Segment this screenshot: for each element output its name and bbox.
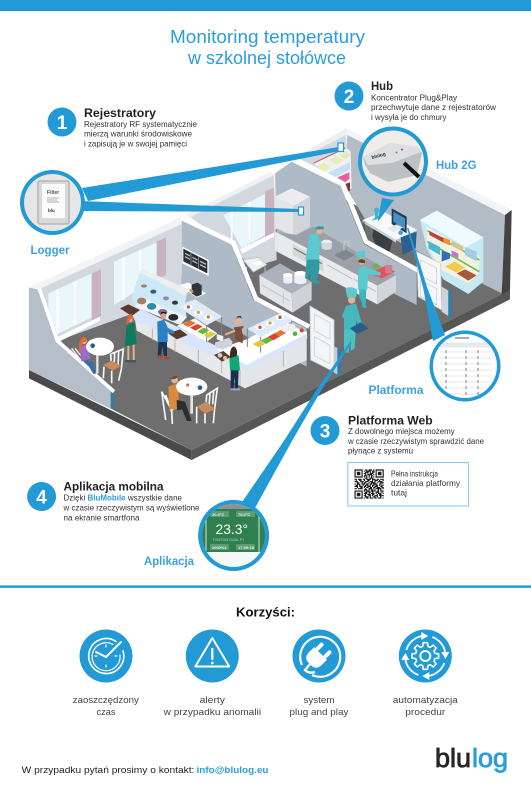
floor slab bbox=[29, 197, 510, 460]
logo: blulog: log bbox=[472, 745, 508, 773]
partition wall: kitchen bbox=[275, 159, 418, 305]
food on the counter bbox=[137, 284, 304, 362]
callout: logger bbox=[20, 170, 85, 235]
step 4: Aplikacja mobilna: Aplikacja mobilna bbox=[64, 482, 164, 494]
benefit: plug and play bbox=[290, 630, 349, 718]
coffee machine bbox=[179, 283, 206, 298]
QR code bbox=[354, 469, 384, 499]
title: w szkolnej stołówce bbox=[187, 47, 346, 68]
logo: blulog bbox=[435, 745, 508, 773]
door to kitchen bbox=[310, 306, 341, 377]
callout: logger: Filter bbox=[47, 190, 59, 196]
number badge 3: 3 bbox=[320, 422, 330, 442]
benefit: automation bbox=[393, 630, 459, 718]
icon: gear with arrows bbox=[399, 630, 452, 682]
customer in green dress bbox=[125, 314, 137, 362]
step 2: Hub: przechwytuje dane z rejestratorów bbox=[371, 103, 496, 112]
display fridge bbox=[420, 211, 483, 294]
number badge 2 bbox=[334, 82, 364, 110]
benefit: automation: automatyzacja bbox=[393, 695, 459, 706]
step 3: Platforma Web: płynące z systemu bbox=[348, 446, 413, 456]
back room, right wall and shelves bbox=[290, 128, 512, 295]
step 2: Hub: Hub bbox=[371, 81, 393, 93]
step 2: Hub bbox=[334, 81, 496, 122]
benefit: alerts: alerty bbox=[200, 695, 225, 706]
title: Monitoring temperatury bbox=[170, 26, 366, 47]
benefit: automation: procedur bbox=[405, 707, 445, 718]
title bbox=[170, 26, 366, 68]
step 2: Hub: i wysyła je do chmury bbox=[371, 113, 446, 122]
benefit: alerts: w przypadku anomalii bbox=[163, 707, 261, 718]
white chair bbox=[103, 349, 123, 383]
step 1: Rejestratory: mierzą warunki środowiskowe bbox=[84, 130, 193, 138]
partition wall: serving area bbox=[179, 218, 309, 367]
table with seated woman bbox=[70, 337, 114, 374]
wall sensors bbox=[298, 143, 344, 215]
step 2: Hub: Koncentrator Plug&Play bbox=[371, 94, 457, 102]
top bar bbox=[0, 0, 531, 11]
callout: logger: blu bbox=[48, 208, 55, 213]
step 4: Aplikacja mobilna: Dzięki BluMobile wszystkie dane bbox=[64, 494, 183, 503]
step 3: Platforma Web: w czasie rzeczywistym sprawdzić dane bbox=[347, 437, 485, 446]
callout: hub: blulog bbox=[371, 151, 386, 161]
icon: warning triangle bbox=[186, 630, 239, 682]
chef at the sink bbox=[305, 226, 332, 284]
callout: mobile app: 17:09:18 bbox=[238, 545, 255, 550]
number badge 1: 1 bbox=[57, 113, 68, 134]
contact line: W przypadku pytań prosimy o kontakt: bbox=[22, 765, 194, 776]
dining room wall with windows bbox=[29, 217, 182, 342]
label: Hub 2G: Hub 2G bbox=[436, 160, 477, 172]
waitress behind counter bbox=[225, 316, 243, 343]
isometric canteen illustration bbox=[29, 128, 512, 460]
QR instruction box: tutaj bbox=[391, 488, 407, 498]
serving counter bbox=[120, 269, 307, 388]
chef with clipboard bbox=[342, 287, 369, 353]
benefit: saved time: zaoszczędzony bbox=[73, 695, 139, 706]
label: Logger: Logger bbox=[30, 245, 70, 257]
icon: clock with check bbox=[80, 630, 132, 682]
step 3: Platforma Web bbox=[310, 416, 485, 456]
number badge 3 bbox=[310, 416, 340, 445]
customer in green shirt bbox=[229, 346, 240, 390]
number badge 2: 2 bbox=[344, 87, 354, 108]
heading: Korzyści: Korzyści: bbox=[236, 604, 295, 619]
benefit: saved time bbox=[73, 630, 139, 718]
callout: mobile app bbox=[198, 342, 352, 571]
QR instruction box: Pełna instrukcja bbox=[391, 468, 438, 478]
QR instruction box: działania platformy bbox=[391, 478, 461, 488]
QR instruction box bbox=[348, 463, 468, 506]
step 3: Platforma Web: Platforma Web bbox=[348, 416, 433, 428]
callout: mobile app: 2000%1 bbox=[212, 545, 227, 550]
door to back room bbox=[417, 252, 452, 318]
number badge 4: 4 bbox=[36, 488, 47, 508]
step 1: Rejestratory: Rejestratory RF systematycznie bbox=[84, 120, 198, 129]
step 4: Aplikacja mobilna bbox=[27, 482, 200, 522]
left end wall bbox=[29, 287, 114, 410]
benefit: plug and play: system bbox=[304, 695, 335, 706]
number badge 4 bbox=[27, 482, 56, 511]
callout: mobile app: 23.3° bbox=[216, 521, 248, 537]
number badge 1 bbox=[48, 108, 76, 136]
office desk with monitor and hub bbox=[363, 208, 417, 255]
callout: mobile app: 70.0°C bbox=[238, 512, 250, 517]
benefit: plug and play: plug and play bbox=[290, 707, 349, 718]
callout: platform bbox=[407, 228, 500, 402]
benefit: saved time: czas bbox=[96, 707, 116, 718]
label: Platforma: Platforma bbox=[368, 385, 424, 397]
beams from logger to wall sensors bbox=[80, 147, 340, 212]
step 4: Aplikacja mobilna: w czasie rzeczywistym są wyświetlone bbox=[63, 504, 200, 512]
kitchen fridge and counter bbox=[275, 188, 396, 304]
window wall of kitchen bbox=[186, 172, 277, 267]
benefit: alerts bbox=[163, 630, 261, 718]
label: Aplikacja: Aplikacja bbox=[144, 556, 195, 568]
step 1: Rejestratory bbox=[48, 108, 198, 148]
chef at the counter bbox=[356, 250, 381, 308]
icon: plug bbox=[292, 630, 346, 682]
callout: mobile app: TOMTOM DUAL P1 bbox=[212, 538, 244, 542]
step 4: Aplikacja mobilna: na ekranie smartfona bbox=[64, 513, 140, 522]
callout: hub bbox=[358, 126, 428, 222]
table with seated man bbox=[162, 376, 217, 424]
customer in blue bbox=[157, 312, 175, 359]
step 3: Platforma Web: Z dowolnego miejsca możemy bbox=[348, 427, 455, 436]
logo: blulog: blu bbox=[435, 745, 471, 773]
callout: mobile app: 20.4°C bbox=[212, 512, 224, 517]
trolley and kitchen island bbox=[243, 257, 312, 313]
step 1: Rejestratory: i zapisują je w swojej pamięci bbox=[84, 140, 187, 148]
step 1: Rejestratory: Rejestratory bbox=[84, 108, 157, 120]
contact email: info@blulog.eu bbox=[196, 765, 269, 776]
menu board bbox=[182, 247, 209, 276]
section divider bbox=[0, 585, 531, 588]
